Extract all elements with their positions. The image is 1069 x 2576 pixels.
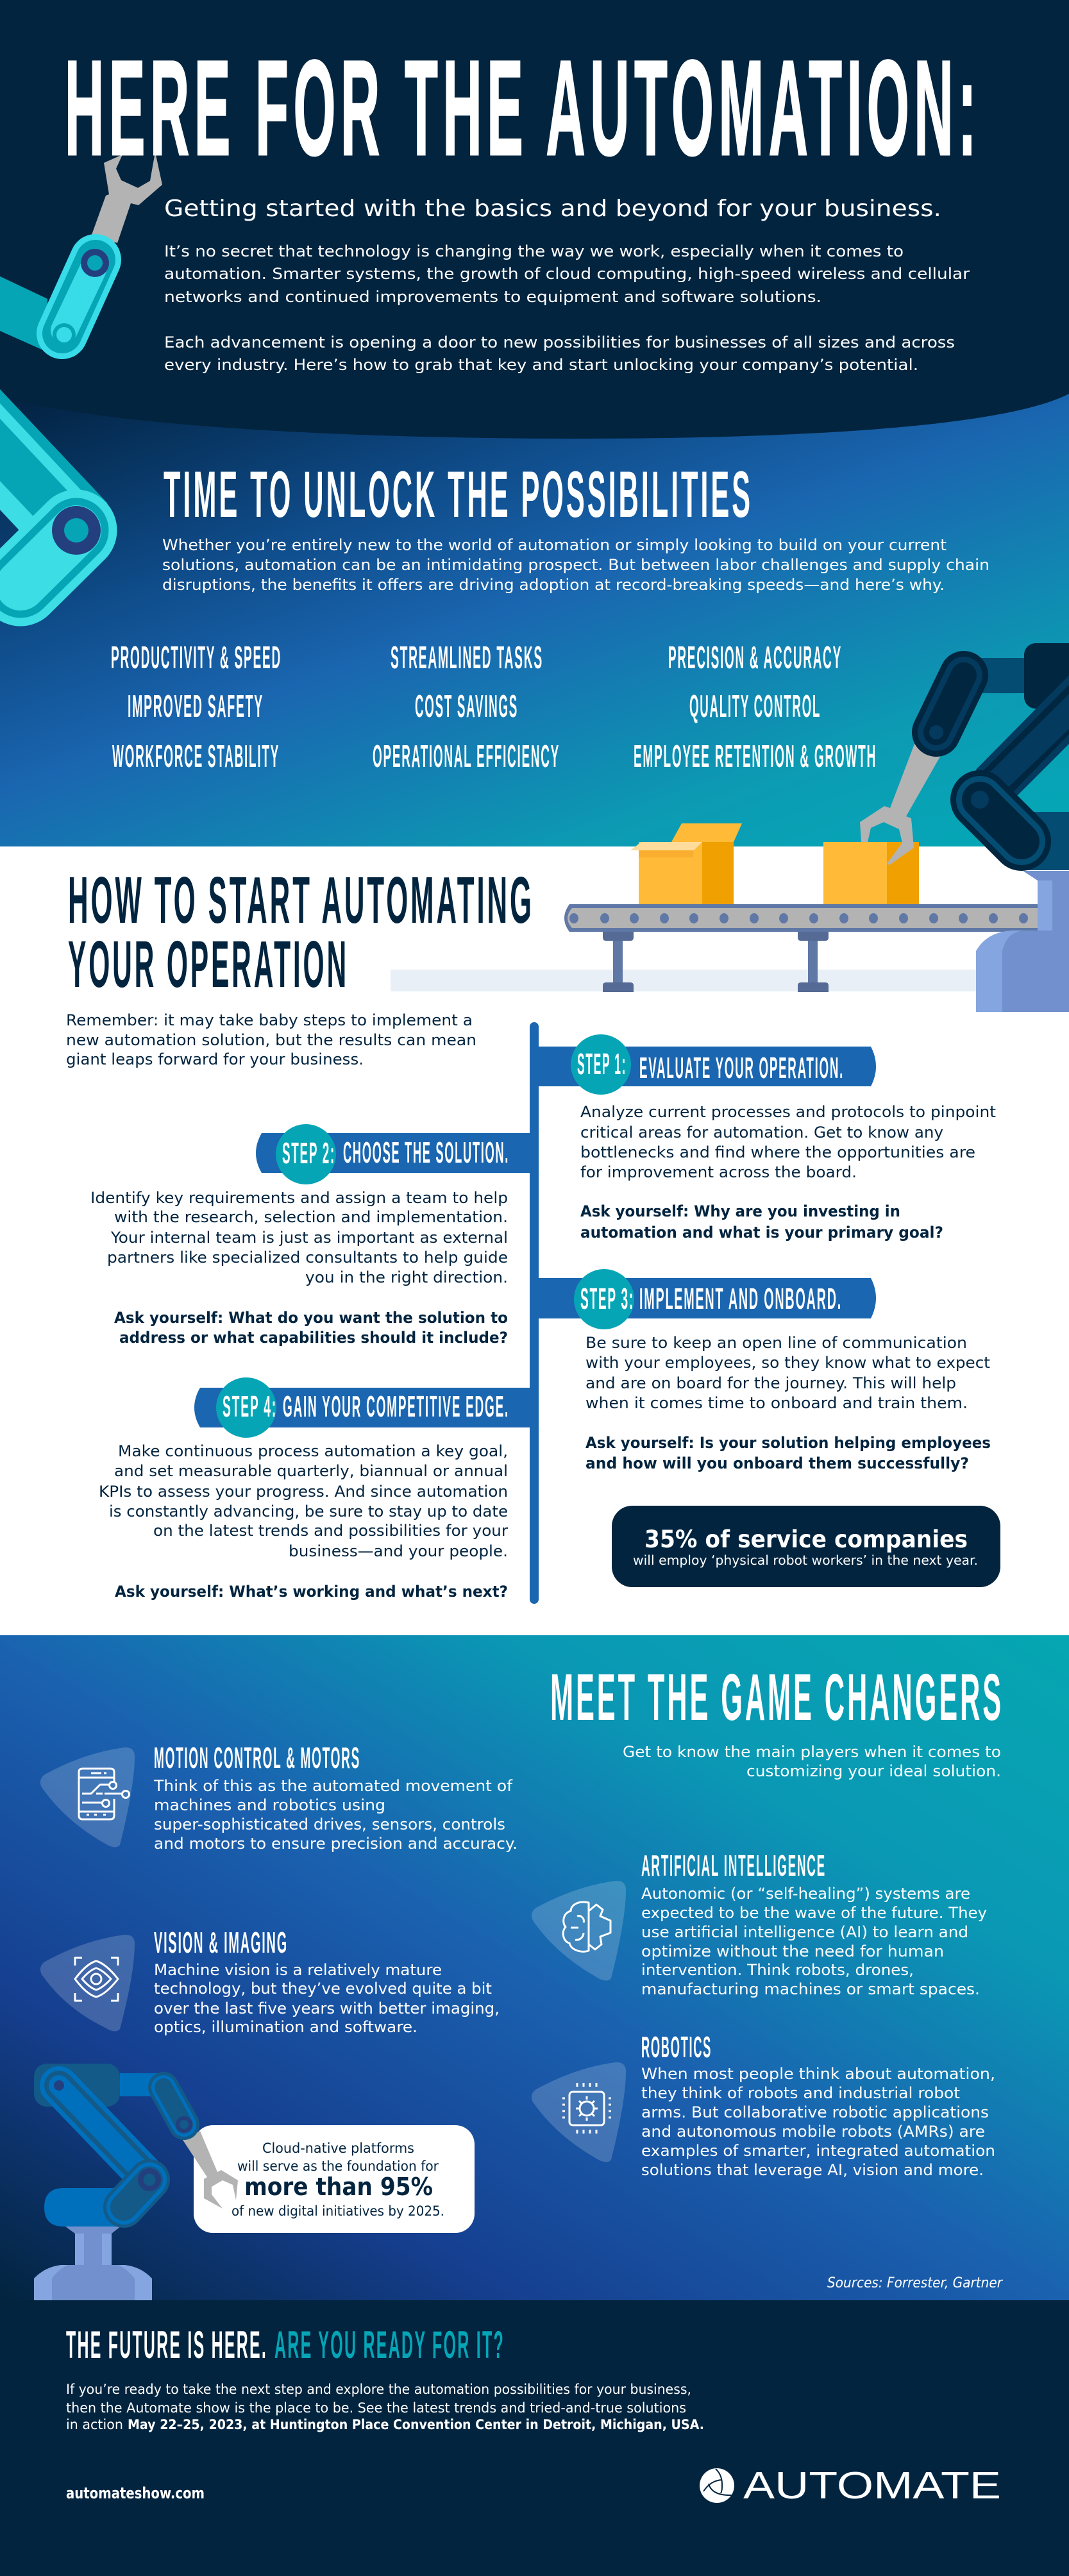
text block: robotics: and autonomous mobile robots (AMRs) are bbox=[641, 2123, 985, 2141]
text: ARE YOU READY FOR IT? bbox=[274, 2323, 505, 2366]
text block: introduction: every industry. Here’s how to grab that key and start unlocking your company’s potential. bbox=[164, 356, 918, 374]
panel: game changers background bbox=[0, 1635, 1069, 2300]
logo: automate bbox=[700, 2464, 1001, 2507]
panel: step 4 banner: STEP 4: bbox=[223, 1390, 277, 1423]
heading: the future is here: THE FUTURE IS HERE. bbox=[66, 2323, 267, 2366]
text block: step 2: Identify key requirements and assign a team to help bbox=[90, 1189, 508, 1207]
text block: motion control: and motors to ensure precision and accuracy. bbox=[154, 1835, 518, 1853]
text block: artificial intelligence: optimize without the need for human bbox=[641, 1942, 944, 1960]
panel: step 3 banner: STEP 3: bbox=[580, 1282, 634, 1315]
text block: vision: VISION & IMAGING bbox=[154, 1926, 288, 1959]
text block: artificial intelligence: manufacturing machines or smart spaces. bbox=[641, 1980, 980, 1998]
sources: Sources: Forrester, Gartner bbox=[827, 2275, 1004, 2291]
panel: step 4 banner bbox=[194, 1377, 530, 1438]
text block: robotics: examples of smarter, integrated automation bbox=[641, 2142, 995, 2160]
text block: game changers intro bbox=[623, 1743, 1001, 1780]
icon: motion control bbox=[40, 1747, 135, 1848]
panel: white how-to background bbox=[0, 846, 1069, 1635]
text block: motion control: MOTION CONTROL & MOTORS bbox=[154, 1741, 360, 1774]
text block: step 2: Ask yourself: What do you want the solution to bbox=[114, 1309, 508, 1327]
callout: more than 95 percent: more than 95% bbox=[244, 2173, 433, 2201]
text block: step 2: partners like specialized consultants to help guide bbox=[107, 1249, 508, 1267]
text block: introduction: It’s no secret that technology is changing the way we work, especially when it comes to bbox=[164, 242, 904, 260]
text block: step 1: Ask yourself: Why are you investing in bbox=[580, 1202, 900, 1220]
list: automation benefits: COST SAVINGS bbox=[415, 689, 518, 724]
icon: floor band bbox=[391, 970, 976, 991]
text block: step 3: and are on board for the journey. This will help bbox=[585, 1374, 956, 1392]
panel: dark header background bbox=[0, 0, 1069, 439]
panel: step 1 banner bbox=[539, 1034, 876, 1095]
text block: vision bbox=[154, 1926, 500, 2036]
text block: step 2: Your internal team is just as important as external bbox=[110, 1229, 508, 1247]
heading: how to start automating bbox=[68, 863, 534, 1001]
text block: step 4: business—and your people. bbox=[289, 1542, 508, 1560]
text block: robotics: solutions that leverage AI, vision and more. bbox=[641, 2161, 984, 2179]
list: automation benefits: IMPROVED SAFETY bbox=[128, 689, 264, 724]
callout: more than 95 percent bbox=[194, 2125, 475, 2233]
list: automation benefits: PRODUCTIVITY & SPEED bbox=[111, 641, 282, 675]
callout: more than 95 percent: of new digital initiatives by 2025. bbox=[231, 2203, 444, 2219]
text block: vision: Machine vision is a relatively mature bbox=[154, 1961, 442, 1979]
text block: footer invitation: May 22–25, 2023, at Huntington Place Convention Center in Detroit, Michigan, USA. bbox=[128, 2417, 704, 2432]
panel: blue possibilities background bbox=[0, 385, 1069, 846]
text block: footer invitation: If you’re ready to take the next step and explore the automation possibilities for your business, bbox=[66, 2382, 691, 2397]
callout: 35 percent: 35% of service companies bbox=[644, 1526, 968, 1553]
text block: footer invitation: then the Automate show is the place to be. See the latest trends and tried-and-true solutions bbox=[66, 2400, 686, 2416]
text block: remember bbox=[66, 1011, 476, 1068]
text block: robotics: arms. But collaborative robotic applications bbox=[641, 2103, 989, 2121]
text block: remember: Remember: it may take baby steps to implement a bbox=[66, 1011, 473, 1029]
text block: game changers intro: customizing your ideal solution. bbox=[746, 1762, 1001, 1780]
text block: step 4: and set measurable quarterly, biannual or annual bbox=[114, 1462, 508, 1480]
panel: step 3 banner bbox=[539, 1269, 876, 1329]
text block: artificial intelligence: Autonomic (or “self-healing”) systems are bbox=[641, 1885, 970, 1903]
subtitle: Getting started with the basics and beyond for your business. bbox=[164, 196, 941, 222]
icon: vision bbox=[40, 1935, 135, 2032]
text block: step 4: is constantly advancing, be sure to stay up to date bbox=[109, 1503, 508, 1520]
logo: automate: AUTOMATE bbox=[743, 2464, 1001, 2507]
text block: artificial intelligence: intervention. Think robots, drones, bbox=[641, 1961, 914, 1979]
text block: step 3 bbox=[585, 1334, 991, 1472]
text block: step 3: when it comes time to onboard and train them. bbox=[585, 1394, 968, 1412]
text block: remember: new automation solution, but the results can mean bbox=[66, 1031, 476, 1049]
text block: vision: optics, illumination and software. bbox=[154, 2018, 417, 2036]
website: automateshow.com bbox=[66, 2484, 205, 2502]
list: automation benefits: OPERATIONAL EFFICIENCY bbox=[373, 739, 560, 774]
panel: step 2 banner: STEP 2: bbox=[282, 1136, 335, 1170]
text block: introduction: networks and continued improvements to equipment and software solutions. bbox=[164, 288, 821, 306]
text block: motion control: machines and robotics using bbox=[154, 1796, 385, 1814]
text block: artificial intelligence: use artificial intelligence (AI) to learn and bbox=[641, 1923, 968, 1941]
text block: motion control: super-sophisticated drives, sensors, controls bbox=[154, 1815, 505, 1833]
icon: teal robot arm top left bbox=[0, 152, 162, 352]
text block: step 3: and how will you onboard them successfully? bbox=[585, 1454, 969, 1472]
list: automation benefits bbox=[111, 641, 877, 774]
text block: robotics: ROBOTICS bbox=[641, 2030, 712, 2064]
panel: footer background bbox=[0, 2300, 1069, 2576]
text block: step 3: Ask yourself: Is your solution helping employees bbox=[585, 1434, 991, 1452]
heading: how to start automating: YOUR OPERATION bbox=[68, 927, 349, 1001]
text block: step 1: for improvement across the board. bbox=[580, 1163, 857, 1181]
icon: teal robot arm left bbox=[0, 389, 108, 585]
text block: artificial intelligence bbox=[641, 1849, 987, 1998]
callout: 35 percent bbox=[612, 1506, 1000, 1587]
text: CHOOSE THE SOLUTION. bbox=[343, 1136, 509, 1169]
text block: step 4 bbox=[99, 1442, 508, 1601]
panel: step 2 banner bbox=[256, 1124, 530, 1184]
icon: artificial intelligence bbox=[532, 1881, 626, 1981]
text block: game changers intro: Get to know the main players when it comes to bbox=[623, 1743, 1001, 1761]
text block: step 3: Be sure to keep an open line of communication bbox=[585, 1334, 967, 1352]
text block: possibilities intro: Whether you’re entirely new to the world of automation or simply looking to build on your current bbox=[162, 536, 947, 554]
list: automation benefits: STREAMLINED TASKS bbox=[391, 641, 543, 675]
icon: conveyor with boxes bbox=[564, 823, 1039, 992]
text block: footer invitation: in action bbox=[66, 2417, 123, 2432]
text block: remember: giant leaps forward for your business. bbox=[66, 1050, 364, 1068]
timeline line bbox=[530, 1022, 539, 1604]
text block: step 4: KPIs to assess your progress. And since automation bbox=[99, 1483, 508, 1501]
text block: step 2: you in the right direction. bbox=[305, 1268, 508, 1286]
callout: 35 percent: will employ ‘physical robot workers’ in the next year. bbox=[633, 1553, 978, 1568]
icon: robotics chip bbox=[532, 2062, 626, 2162]
text block: step 1 bbox=[580, 1103, 996, 1242]
text block: robotics: When most people think about automation, bbox=[641, 2065, 995, 2083]
text block: vision: over the last five years with better imaging, bbox=[154, 1999, 500, 2017]
text block: robotics bbox=[641, 2030, 995, 2179]
text block: possibilities intro bbox=[162, 536, 989, 594]
list: automation benefits: WORKFORCE STABILITY bbox=[112, 739, 280, 774]
text block: step 4: on the latest trends and possibilities for your bbox=[153, 1522, 508, 1540]
text block: step 2 bbox=[90, 1189, 508, 1347]
text block: step 4: Make continuous process automation a key goal, bbox=[118, 1442, 508, 1460]
text block: introduction: Each advancement is opening a door to new possibilities for businesses of all sizes and across bbox=[164, 333, 955, 351]
list: automation benefits: QUALITY CONTROL bbox=[689, 689, 821, 724]
callout: more than 95 percent: Cloud-native platforms bbox=[262, 2141, 414, 2156]
text block: possibilities intro: solutions, automation can be an intimidating prospect. But between labor challenges and supply chain bbox=[162, 556, 989, 574]
text block: step 1: automation and what is your primary goal? bbox=[580, 1224, 943, 1242]
text block: step 3: with your employees, so they know what to expect bbox=[585, 1354, 990, 1372]
text block: step 1: bottlenecks and find where the opportunities are bbox=[580, 1143, 975, 1161]
text block: introduction bbox=[164, 242, 970, 374]
text block: robotics: they think of robots and industrial robot bbox=[641, 2084, 960, 2102]
text block: step 4: Ask yourself: What’s working and what’s next? bbox=[115, 1583, 508, 1601]
callout: more than 95 percent: will serve as the foundation for bbox=[237, 2159, 439, 2174]
text block: step 2: address or what capabilities should it include? bbox=[119, 1329, 508, 1347]
text block: motion control: Think of this as the automated movement of bbox=[153, 1777, 513, 1795]
icon: blue robot arm lower left bbox=[34, 2064, 238, 2300]
text block: motion control bbox=[153, 1741, 518, 1853]
text block: introduction: automation. Smarter systems, the growth of cloud computing, high-speed wireless and cellular bbox=[164, 265, 970, 283]
text block: artificial intelligence: expected to be the wave of the future. They bbox=[641, 1904, 987, 1922]
panel: step 1 banner: STEP 1: bbox=[577, 1047, 627, 1081]
text block: step 2: with the research, selection and implementation. bbox=[114, 1208, 508, 1226]
text block: footer invitation bbox=[66, 2382, 704, 2432]
text block: vision: technology, but they’ve evolved quite a bit bbox=[154, 1980, 492, 1998]
icon: dark robot arm right bbox=[860, 643, 1069, 1012]
text block: possibilities intro: disruptions, the benefits it offers are driving adoption at record-breaking speeds—and here’s why. bbox=[162, 576, 945, 594]
text block: step 1: critical areas for automation. Get to know any bbox=[580, 1124, 943, 1141]
text block: step 1: Analyze current processes and protocols to pinpoint bbox=[580, 1103, 996, 1121]
text: GAIN YOUR COMPETITIVE EDGE. bbox=[283, 1390, 509, 1423]
